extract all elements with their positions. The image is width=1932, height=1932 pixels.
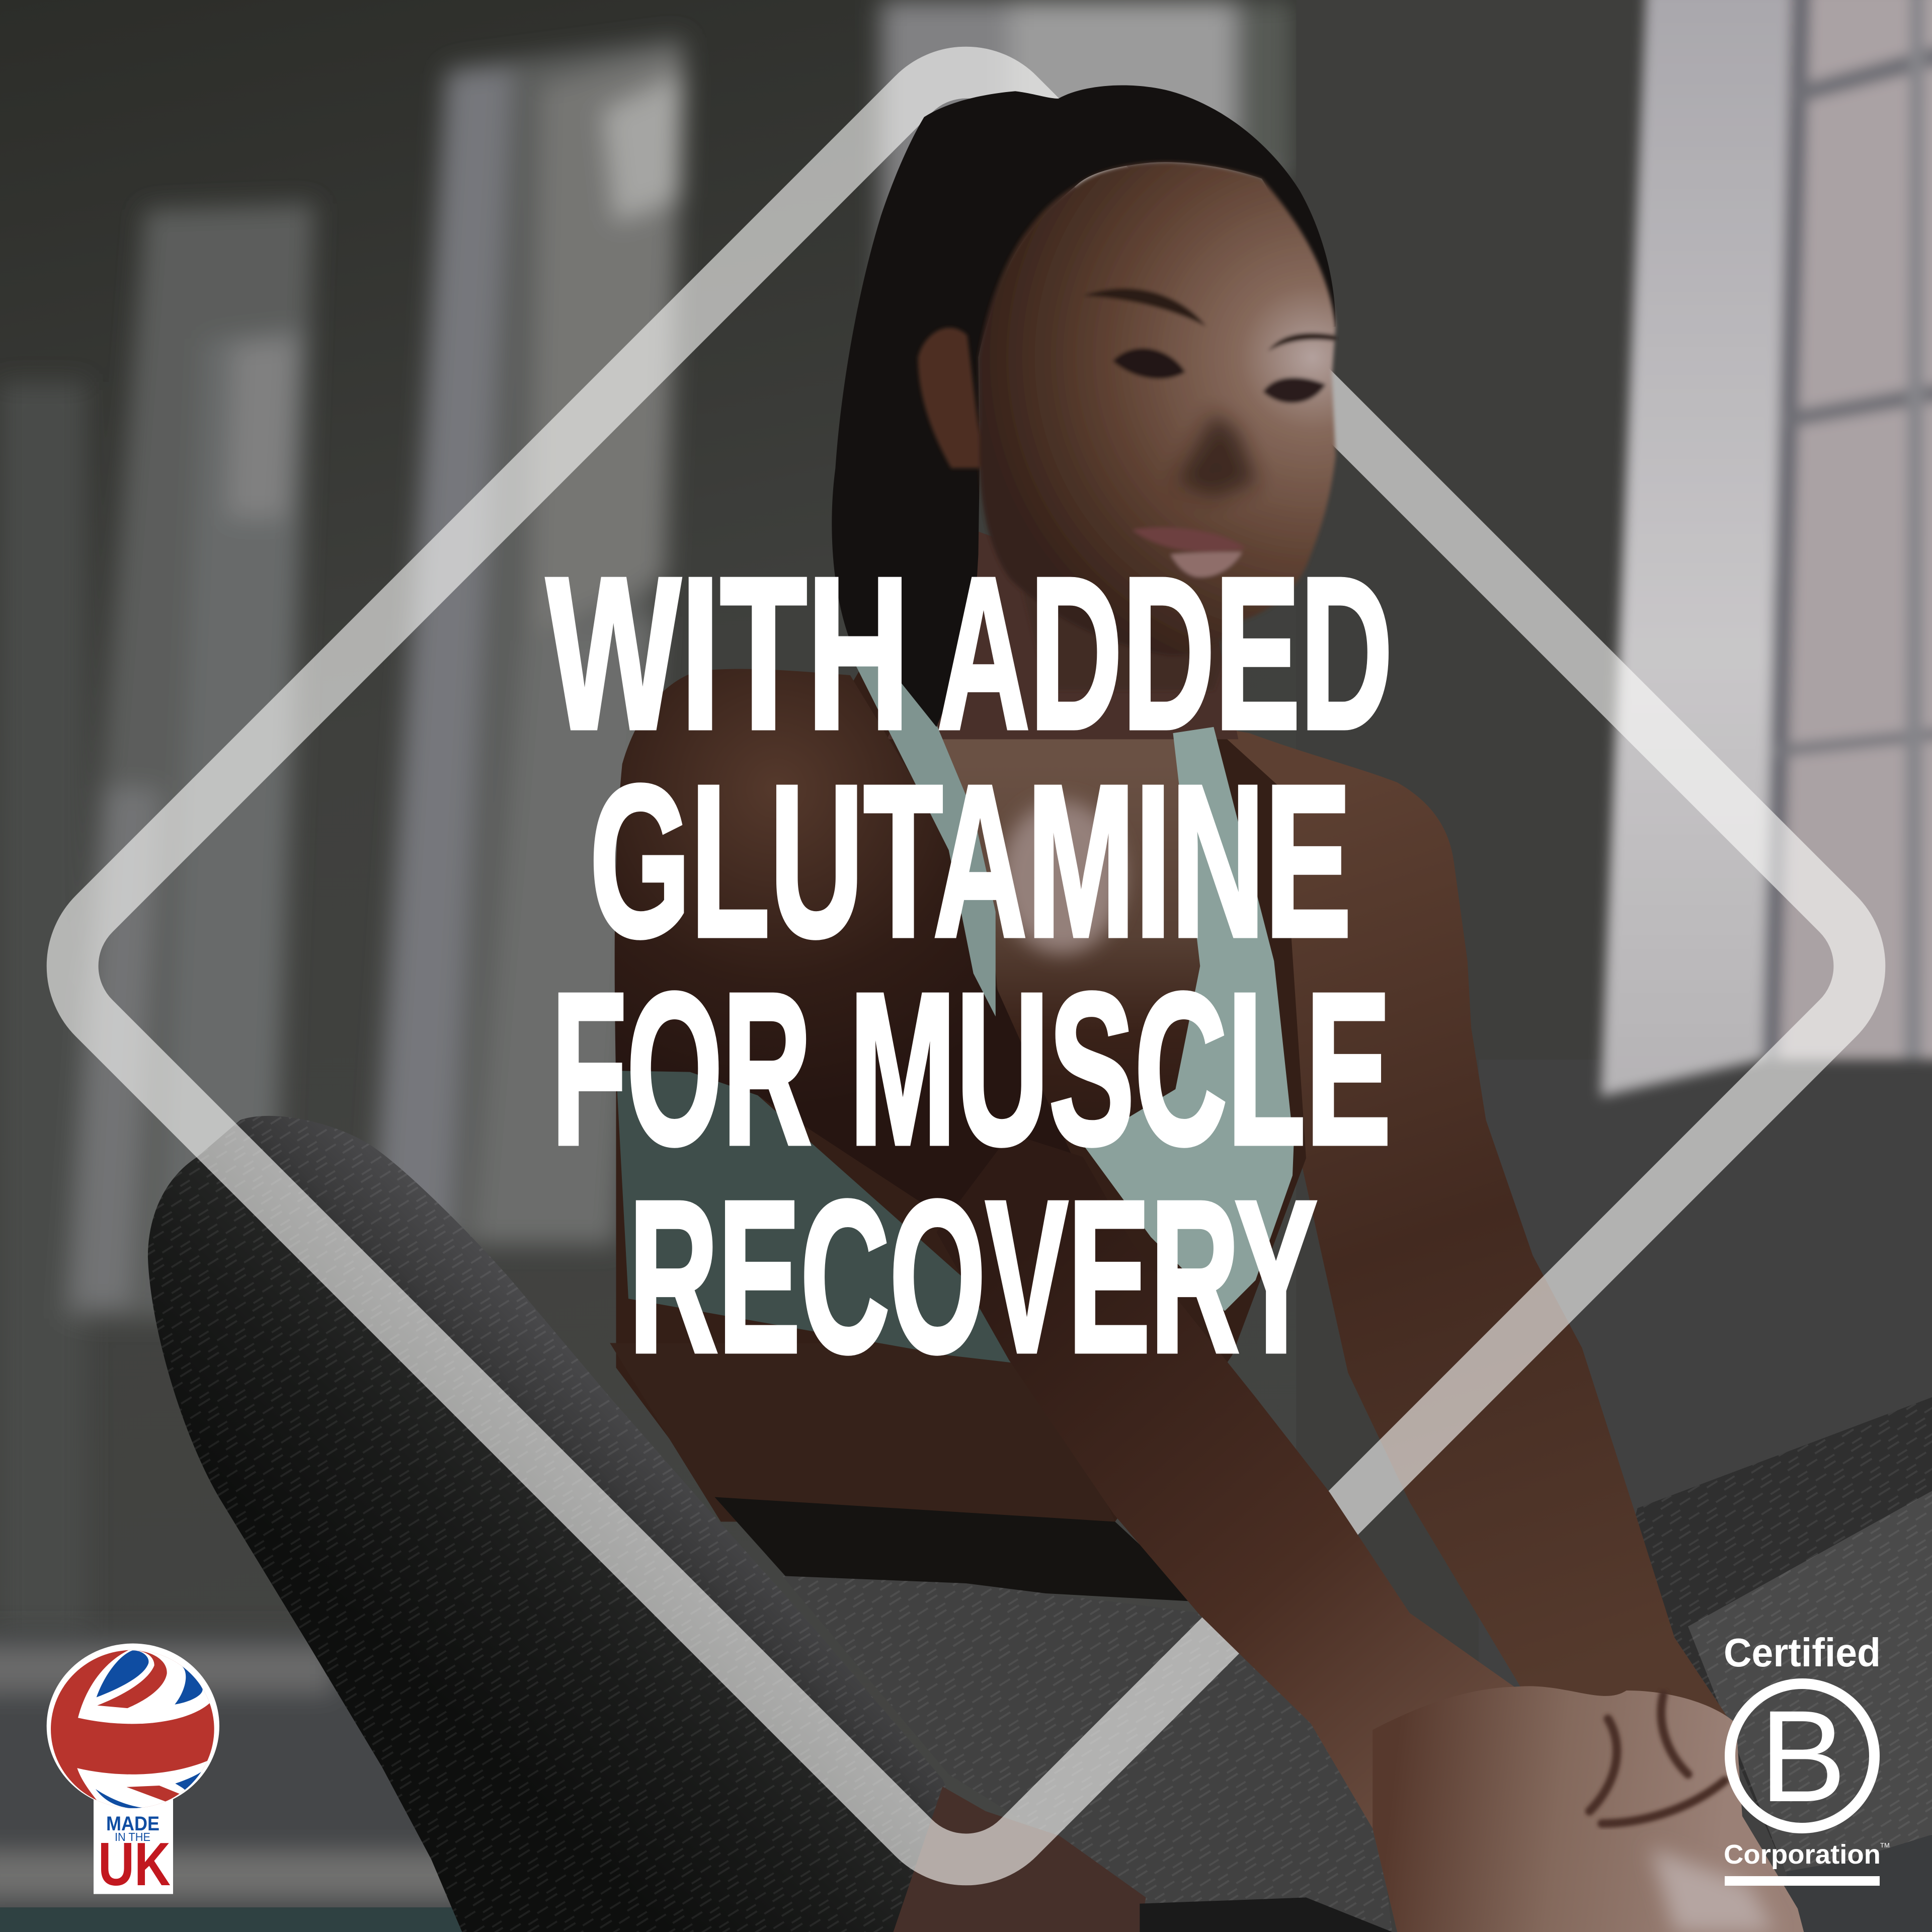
certified label: Certified (1724, 1630, 1881, 1675)
B circle (1730, 1683, 1875, 1828)
underline (1725, 1876, 1880, 1886)
line 1 (546, 533, 1393, 774)
line 1: WITH (546, 533, 910, 774)
hair (832, 85, 1336, 727)
waistband (714, 1497, 1201, 1602)
line 4: RECOVERY (629, 1156, 1317, 1398)
torso (616, 665, 1306, 1521)
line 3 (551, 948, 1391, 1190)
line 2: GLUTAMINE (590, 741, 1351, 982)
line 3: FOR (551, 948, 812, 1190)
shoe (1140, 1897, 1392, 1932)
corporation label: Corporation (1724, 1839, 1881, 1870)
eyes (1112, 348, 1185, 379)
bra strap right and cup (1083, 727, 1294, 1311)
bra left cup (616, 1071, 1013, 1363)
pelvis leggings (782, 1576, 1392, 1932)
lips (1133, 527, 1246, 552)
hand highlight (1651, 1848, 1775, 1932)
far arm and shoulder (1214, 727, 1736, 1823)
face (978, 162, 1336, 656)
foot (894, 1787, 1146, 1932)
near leg (148, 1116, 961, 1932)
made label: MADE (106, 1813, 159, 1835)
badge: made in the UK (45, 1643, 221, 1898)
far leg (1602, 1397, 1932, 1872)
front forearm (936, 1134, 1602, 1932)
hands (1373, 1686, 1804, 1932)
trademark: TM (1880, 1841, 1890, 1849)
eyebrows (1083, 288, 1206, 327)
line 3: MUSCLE (849, 948, 1391, 1190)
finger gaps (1589, 1694, 1725, 1823)
UK label: UK (98, 1830, 171, 1898)
B letter: B (1759, 1683, 1846, 1829)
near shoulder and upper arm (615, 669, 1084, 1269)
line 1: ADDED (937, 533, 1393, 774)
floor stripes (0, 1633, 690, 1932)
right wall (1296, 0, 1654, 1932)
chest highlight (1001, 801, 1123, 954)
chin shadow (1023, 592, 1237, 690)
in the label: IN THE (115, 1830, 150, 1843)
ear (918, 328, 983, 468)
head (918, 162, 1336, 690)
bra strap left (853, 659, 996, 1016)
neck (887, 530, 1238, 739)
badges layer (46, 1637, 1889, 1894)
chest (936, 727, 1238, 1148)
badge: certified B corporation (1724, 1630, 1890, 1886)
nose shadow (1177, 413, 1257, 498)
